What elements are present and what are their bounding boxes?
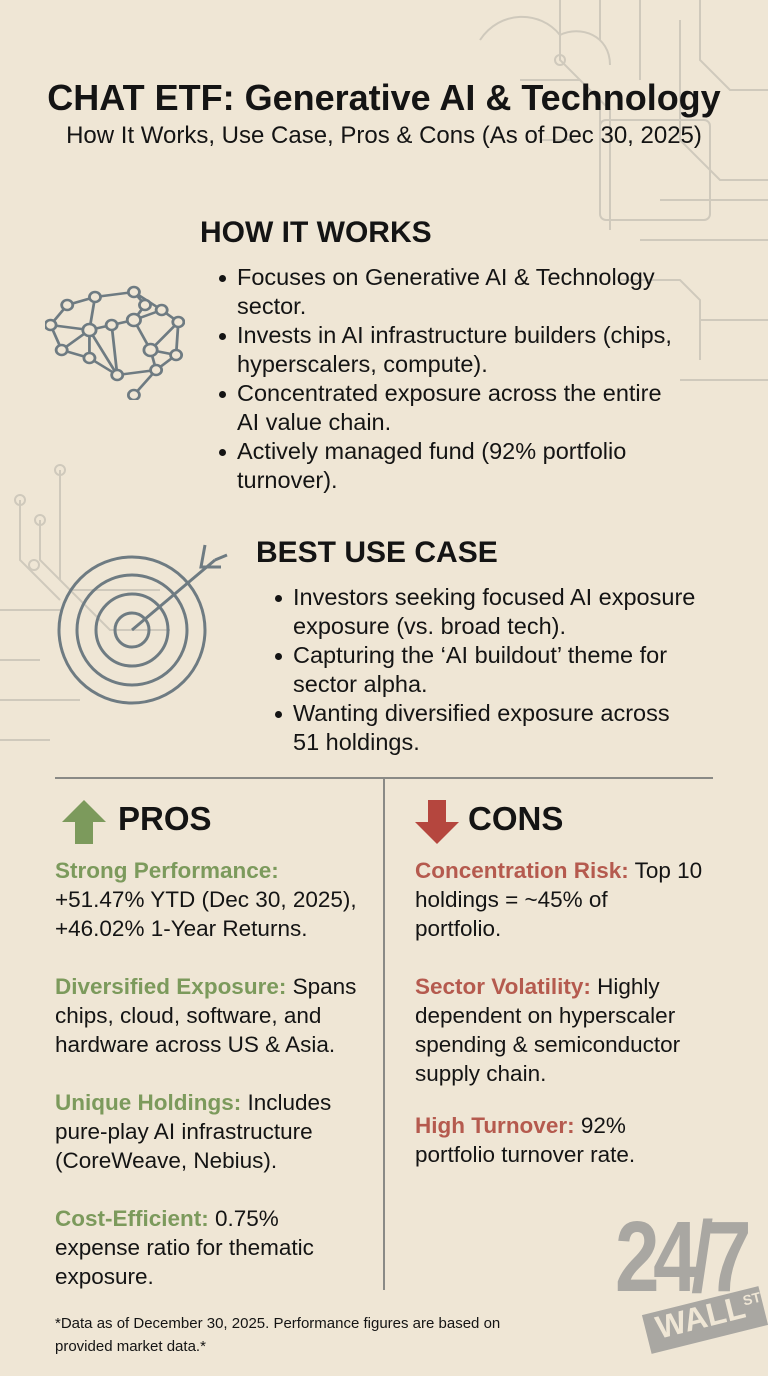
cons text [415, 858, 702, 1167]
pros text: pure-play AI infrastructure [55, 1119, 313, 1144]
bullets: how it works [219, 264, 672, 493]
bullets: how it works: Focuses on Generative AI & Technology [237, 264, 655, 290]
bullets: how it works: Actively managed fund (92% portfolio [237, 438, 626, 464]
icon: target with arrow [58, 544, 228, 704]
bullets: best use case: Capturing the ‘AI buildout’ theme for [293, 642, 667, 668]
pros text: Cost-Efficient: 0.75% [55, 1206, 279, 1231]
pros text: +46.02% 1-Year Returns. [55, 916, 307, 941]
heading: pros: PROS [118, 800, 212, 837]
logo: 24/7 Wall St: WALLST [652, 1289, 762, 1346]
pros text: exposure. [55, 1264, 154, 1289]
icon: brain network [45, 286, 185, 400]
footnote: *Data as of December 30, 2025. Performance figures are based on [55, 1315, 500, 1332]
title: CHAT ETF: Generative AI & Technology [47, 77, 721, 118]
pros text: Diversified Exposure: Spans [55, 974, 356, 999]
cons text: High Turnover: 92% [415, 1113, 626, 1138]
bullets: best use case: exposure (vs. broad tech). [293, 613, 566, 639]
heading: how it works: HOW IT WORKS [200, 216, 432, 249]
pros text: expense ratio for thematic [55, 1235, 314, 1260]
bullets: how it works: turnover). [237, 467, 338, 493]
logo: 24/7 Wall St: 24/7 [615, 1201, 745, 1313]
subtitle: How It Works, Use Case, Pros & Cons (As of Dec 30, 2025) [66, 122, 702, 149]
pros text: hardware across US & Asia. [55, 1032, 335, 1057]
icon: down arrow [415, 800, 459, 844]
bullets: best use case: Investors seeking focused AI exposure [293, 584, 695, 610]
cons text: dependent on hyperscaler [415, 1003, 675, 1028]
pros text: chips, cloud, software, and [55, 1003, 321, 1028]
bullets: best use case: sector alpha. [293, 671, 428, 697]
bullets: how it works: AI value chain. [237, 409, 391, 435]
pros text [55, 858, 357, 1289]
panel: cons [415, 800, 702, 1167]
cons text: portfolio turnover rate. [415, 1142, 635, 1167]
bullets: how it works: sector. [237, 293, 306, 319]
cons text: Sector Volatility: Highly [415, 974, 660, 999]
pros text: (CoreWeave, Nebius). [55, 1148, 277, 1173]
logo: 24/7 Wall St [615, 1201, 768, 1354]
cons text: Concentration Risk: Top 10 [415, 858, 702, 883]
cons text: portfolio. [415, 916, 501, 941]
pros text: Strong Performance: [55, 858, 279, 883]
pros text: Unique Holdings: Includes [55, 1090, 331, 1115]
bullets: best use case [275, 584, 695, 755]
heading: cons: CONS [468, 800, 563, 837]
pros text: +51.47% YTD (Dec 30, 2025), [55, 887, 357, 912]
cons text: holdings = ~45% of [415, 887, 608, 912]
bullets: how it works: Concentrated exposure across the entire [237, 380, 662, 406]
bullets: best use case: 51 holdings. [293, 729, 420, 755]
icon: up arrow [62, 800, 106, 844]
cons text: supply chain. [415, 1061, 546, 1086]
footnote: provided market data.* [55, 1338, 206, 1355]
heading: best use case: BEST USE CASE [256, 536, 498, 569]
cons text: spending & semiconductor [415, 1032, 680, 1057]
bullets: how it works: Invests in AI infrastructure builders (chips, [237, 322, 672, 348]
bullets: best use case: Wanting diversified exposure across [293, 700, 670, 726]
footnote [55, 1315, 500, 1355]
panel: pros [55, 800, 357, 1289]
bullets: how it works: hyperscalers, compute). [237, 351, 488, 377]
